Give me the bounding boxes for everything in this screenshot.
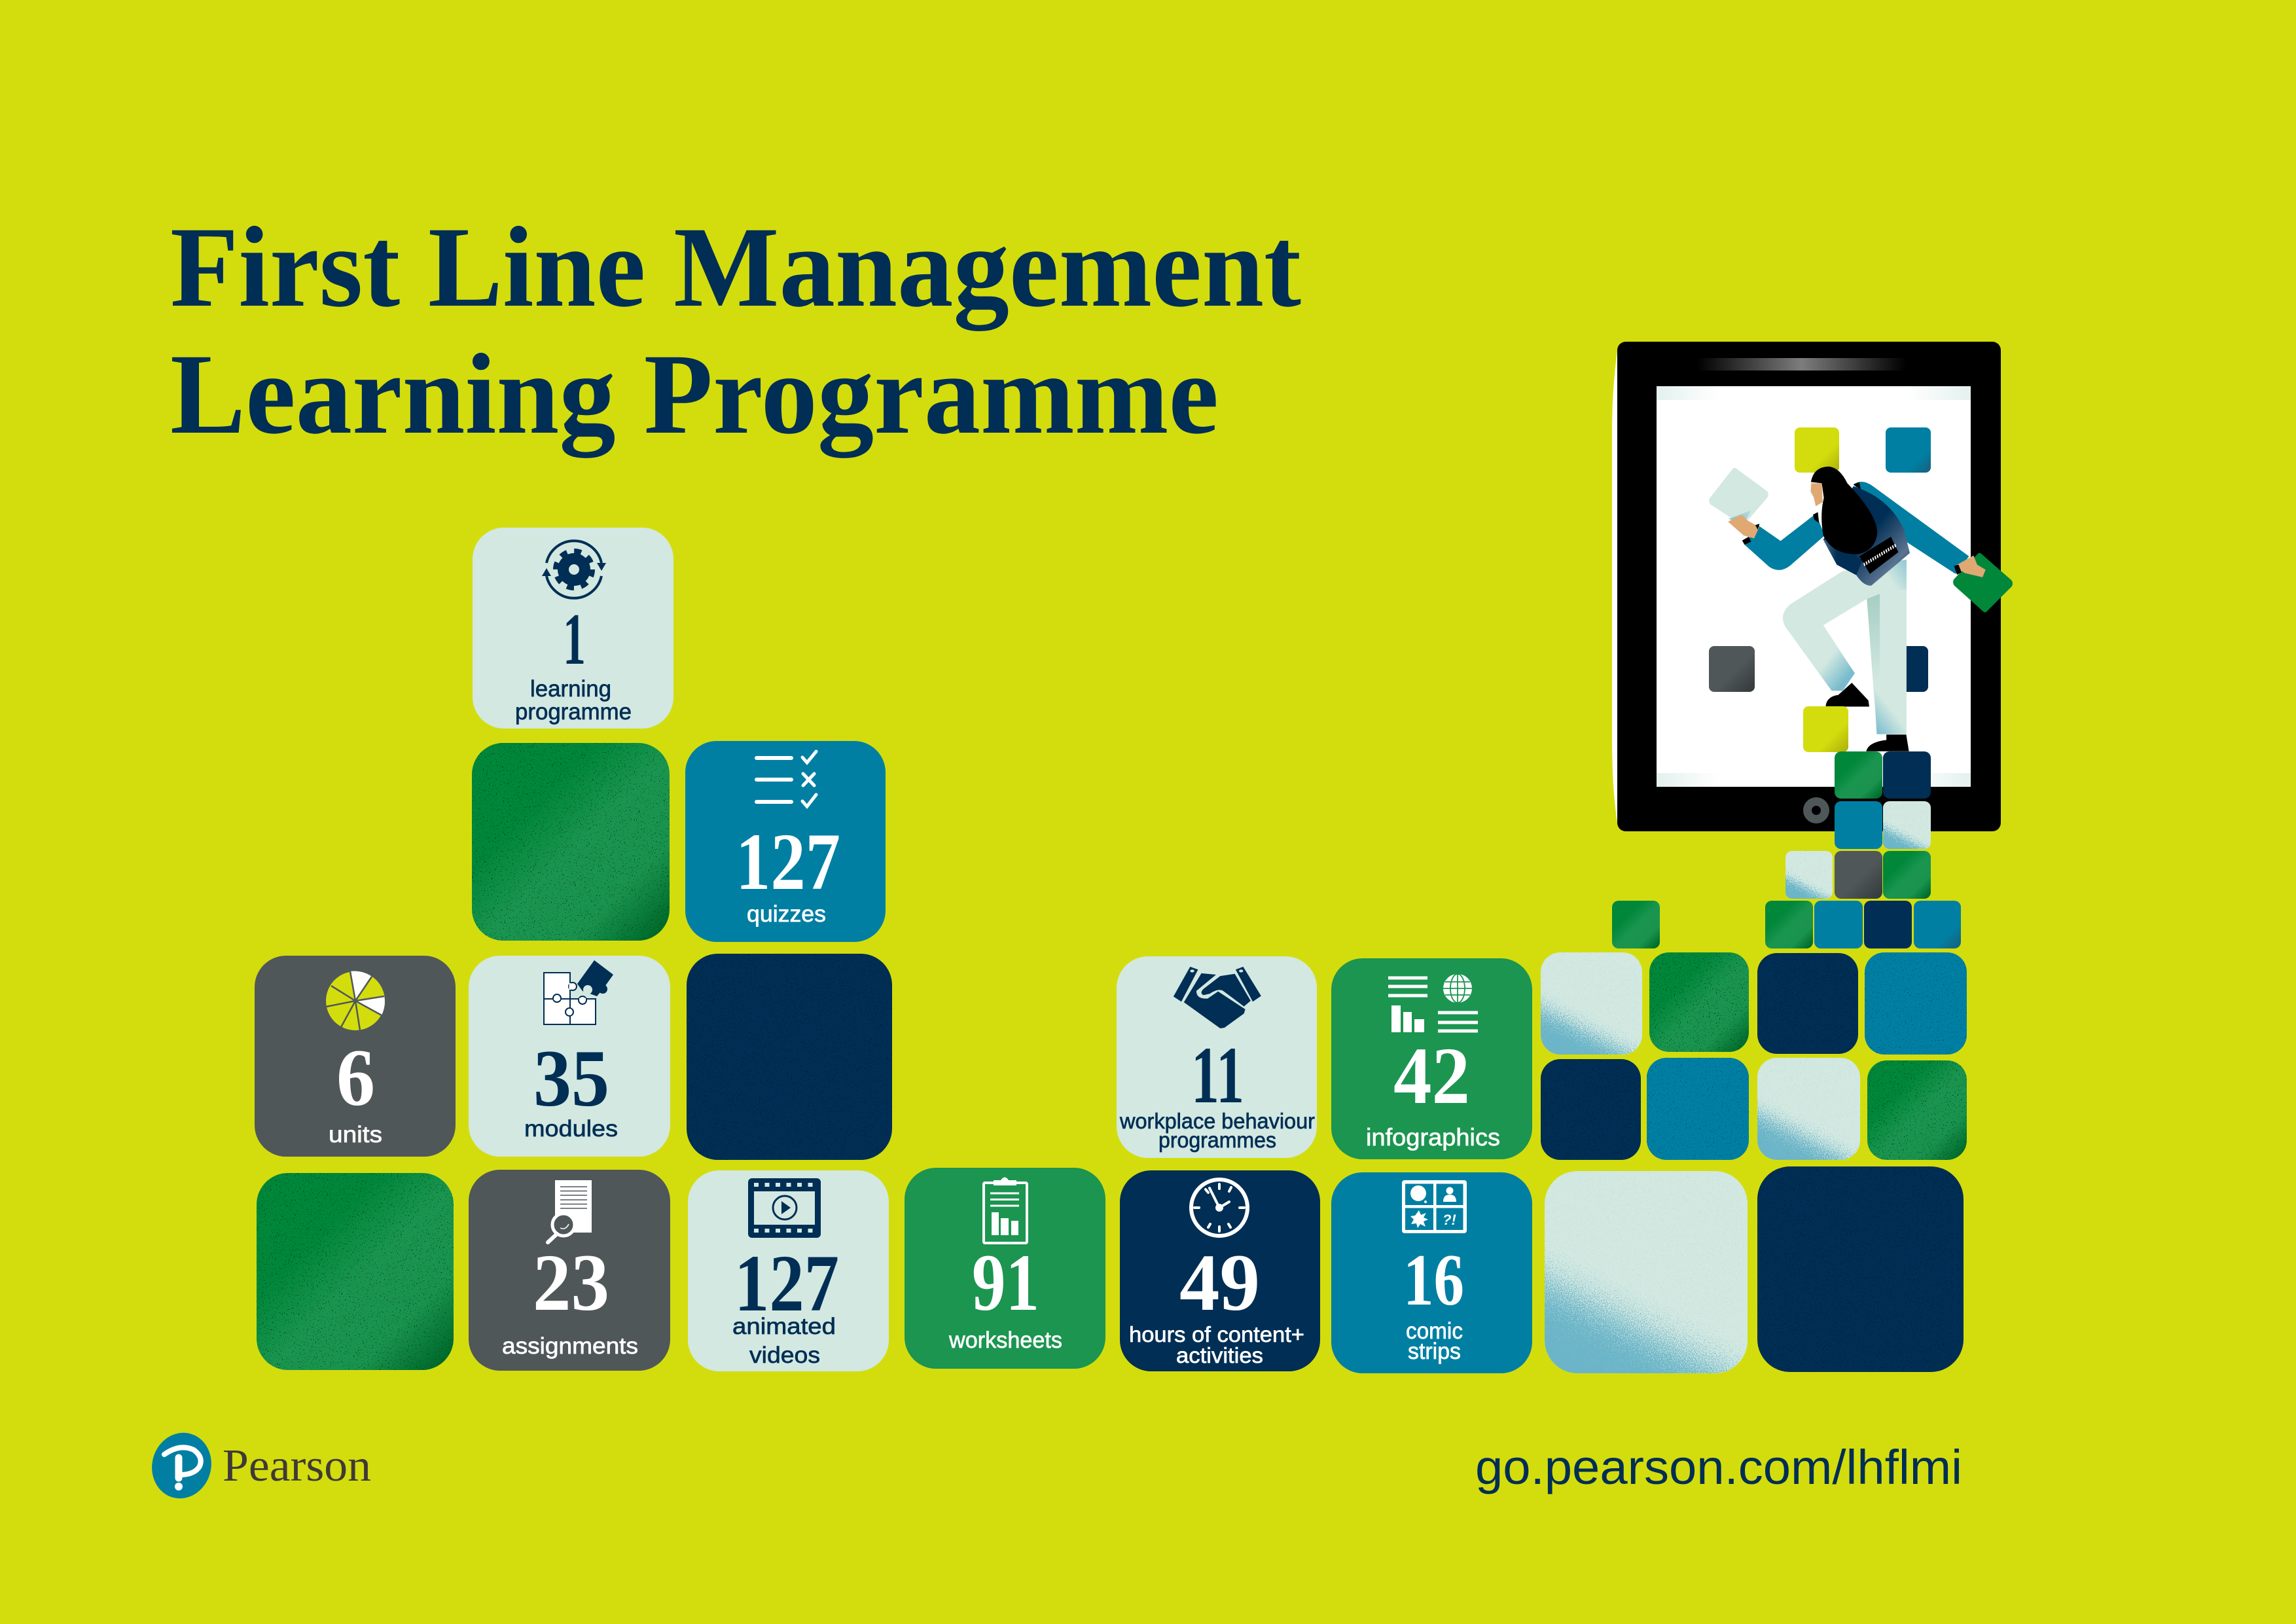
hair	[1811, 467, 1877, 554]
tile: 91 worksheets: worksheets	[948, 1327, 1062, 1353]
tile: 35 modules: modules	[524, 1116, 618, 1142]
title	[170, 204, 1301, 458]
icon: checklist	[757, 751, 816, 806]
tile: 127 animated videos: animated	[732, 1314, 836, 1339]
backpack	[1823, 486, 1910, 586]
icon: gear with arrows	[542, 541, 606, 598]
tile: 49 hours of content + activities	[1120, 1170, 1320, 1371]
tile: 6 units: 6	[336, 1033, 375, 1123]
tile: 23 assignments	[469, 1170, 670, 1371]
tile: 127 animated videos: 127	[734, 1238, 839, 1328]
icon: comic panels: ?!	[1443, 1212, 1456, 1228]
title: First Line Management	[170, 204, 1301, 331]
tile: 11 workplace behaviour programmes: 11	[1191, 1030, 1244, 1120]
backpack pocket and zip	[1859, 537, 1899, 574]
trousers	[1783, 560, 1907, 734]
tile: 49 hours of content + activities: activities	[1176, 1343, 1263, 1367]
tile: 23 assignments: 23	[533, 1238, 609, 1327]
tile: 1 learning programme: 1	[563, 599, 586, 680]
tile: 42 infographics	[1331, 958, 1532, 1159]
tablet illustration	[1612, 342, 2001, 831]
held tile: green	[1956, 557, 2009, 608]
tile: 1 learning programme	[473, 528, 673, 729]
tile: 1 learning programme: programme	[515, 699, 632, 725]
tile: 35 modules	[469, 956, 670, 1157]
title: Learning Programme	[170, 331, 1219, 458]
block stack under figure	[1612, 706, 1961, 948]
tile: 11 workplace behaviour programmes: programmes	[1158, 1128, 1276, 1152]
tile: 127 animated videos: videos	[749, 1343, 820, 1368]
left arm	[1744, 514, 1825, 570]
figure climbing the blocks	[1712, 467, 2009, 751]
tile: 16 comic strips: strips	[1408, 1339, 1461, 1364]
tile: 1 learning programme: learning	[530, 676, 611, 702]
decorative tile: green upper	[472, 743, 670, 941]
tile: 23 assignments: assignments	[502, 1333, 638, 1359]
icon: pie chart	[326, 971, 385, 1030]
held tile: light	[1712, 472, 1765, 525]
tile: 16 comic strips: 16	[1403, 1240, 1464, 1321]
icon: clipboard	[984, 1177, 1027, 1243]
tile: 127 quizzes: 127	[736, 817, 840, 907]
tile: 6 units: units	[329, 1122, 382, 1147]
tile: 16 comic strips: comic	[1406, 1318, 1463, 1344]
icon: document with magnifier	[548, 1180, 592, 1242]
shoes	[1825, 683, 1869, 707]
icon: handshake	[1174, 967, 1261, 1028]
tile: 42 infographics: infographics	[1366, 1124, 1500, 1151]
tile: 127 animated videos	[688, 1170, 889, 1371]
icon: clock	[1191, 1180, 1247, 1236]
decorative tile: navy	[687, 954, 892, 1160]
logo: Pearson: Pearson	[223, 1441, 371, 1491]
logo: Pearson	[145, 1426, 371, 1505]
tile: 91 worksheets	[905, 1168, 1105, 1369]
icon: puzzle	[544, 960, 613, 1024]
tile: 11 workplace behaviour programmes: workplace behaviour	[1119, 1109, 1315, 1133]
tile: 35 modules: 35	[533, 1034, 609, 1123]
face	[1810, 483, 1823, 506]
hands and cuffs	[1728, 514, 1759, 538]
tile: 91 worksheets: 91	[972, 1238, 1039, 1327]
icon: comic panels	[1402, 1180, 1467, 1233]
icon: infographic elements	[1388, 974, 1478, 1032]
decorative tile: green lower	[257, 1173, 454, 1370]
right arm	[1854, 482, 1969, 574]
tile: 49 hours of content + activities: 49	[1179, 1238, 1260, 1327]
tile: 127 quizzes: quizzes	[747, 901, 826, 927]
tile: 49 hours of content + activities: hours of content+	[1129, 1322, 1304, 1346]
tile: 11 workplace behaviour programmes	[1117, 956, 1317, 1158]
website url: go.pearson.com/lhflmi	[1475, 1440, 1962, 1494]
tile: 42 infographics: 42	[1393, 1031, 1470, 1121]
decorative tile wall right	[1541, 952, 1967, 1373]
tile: 16 comic strips	[1331, 1172, 1532, 1373]
tile: 127 quizzes	[685, 741, 886, 942]
icon: film strip	[748, 1178, 821, 1238]
tile: 6 units	[255, 956, 456, 1157]
